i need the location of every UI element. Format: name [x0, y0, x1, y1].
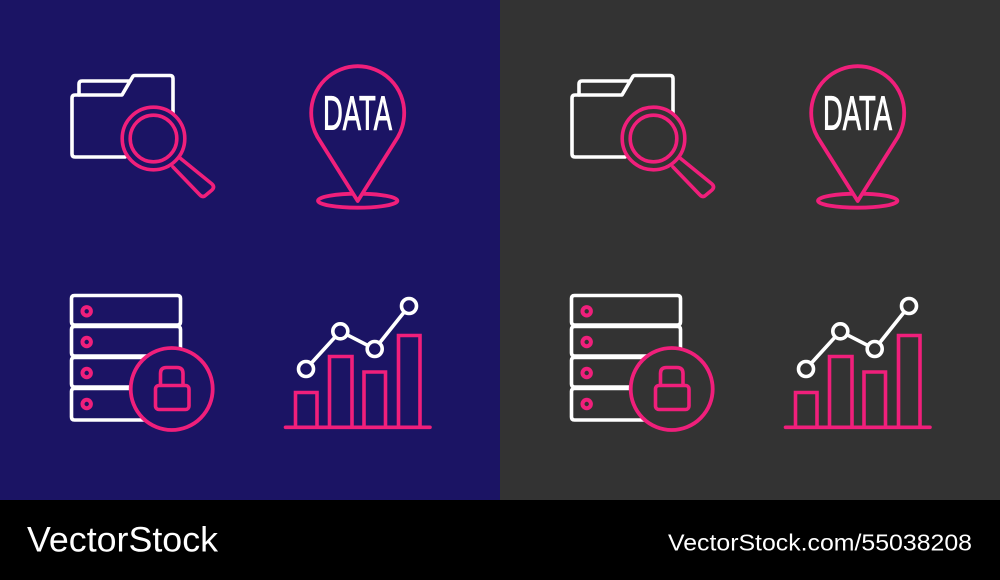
footer bar	[0, 500, 1000, 580]
pin label: DATA	[823, 86, 892, 140]
icon: server with lock	[72, 296, 213, 430]
image id text: VectorStock.com/55038208	[668, 530, 972, 556]
icon: folder with magnifier	[572, 76, 714, 196]
icon: data location pin	[311, 66, 404, 208]
logo text: VectorStock	[27, 520, 219, 560]
icon: bar and line chart	[286, 298, 430, 427]
panel: blue icon set	[0, 0, 500, 500]
pin label: DATA	[323, 86, 392, 140]
panel: gray icon set	[500, 0, 1000, 500]
icon: folder with magnifier	[72, 76, 214, 196]
icon: data location pin	[811, 66, 904, 208]
icon: bar and line chart	[786, 298, 930, 427]
icon: server with lock	[572, 296, 713, 430]
